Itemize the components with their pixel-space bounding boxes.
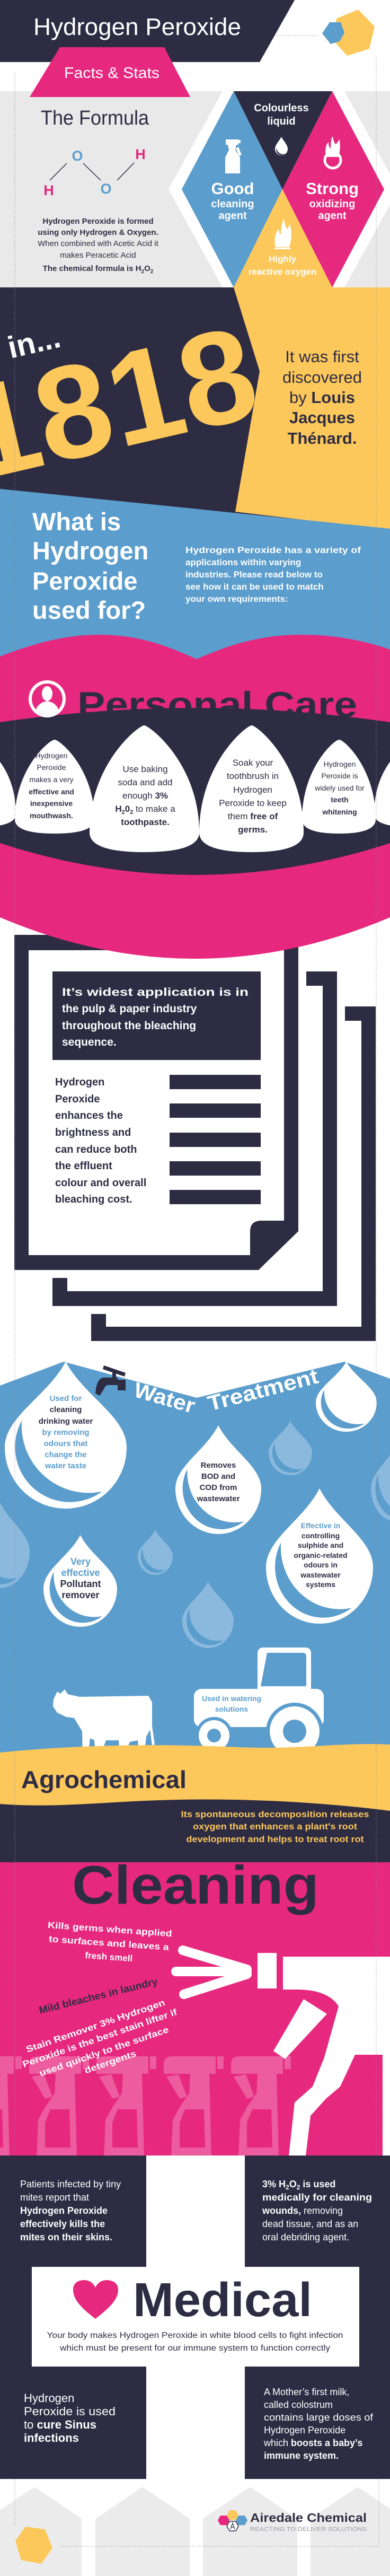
icon: oxidizer flame ring (325, 136, 341, 168)
footer dotted frame (15, 2479, 379, 2546)
text: highly reactive oxygen: Highly (269, 254, 297, 264)
icon: tap (95, 1365, 126, 1396)
text: mild bleaches: Mild bleaches in laundry (38, 1976, 159, 2017)
drop: odour control: sulphide and (298, 1541, 343, 1549)
text: colostrum: contains large doses of (264, 2412, 374, 2423)
footer background shapes (0, 2487, 390, 2576)
text: sinus: Hydrogen (24, 2391, 74, 2405)
text: highly reactive oxygen (249, 254, 316, 277)
subtitle: Facts & Stats (30, 47, 190, 97)
text: toothbrush: Soak your (233, 758, 273, 768)
text: mites: Hydrogen Peroxide (20, 2205, 108, 2216)
text: strong oxidizing agent: oxidizing (309, 198, 355, 210)
text: sinus (24, 2391, 116, 2444)
text: mouthwash: Peroxide (37, 763, 66, 772)
text: mites: mites on their skins. (20, 2232, 112, 2242)
text: intro: see how it can be used to match (185, 582, 324, 592)
callout: widest application: throughout the bleaching (62, 1020, 196, 1032)
panel: medical (0, 2156, 390, 2479)
drop: drinking water: change the (45, 1450, 87, 1459)
text: bleaching benefits: bleaching cost. (55, 1194, 132, 1205)
drop: drinking water: cleaning (50, 1405, 82, 1414)
heading: water treatment: Treatment (205, 1365, 321, 1416)
text: kills germs (48, 1920, 172, 1964)
text: teeth whitening: Hydrogen (324, 760, 356, 768)
text: sinus: infections (24, 2431, 79, 2444)
drop: odour control: controlling (302, 1531, 340, 1540)
text: stain remover: Peroxide is the best stain lifter if (21, 2007, 179, 2070)
text: discovered by (282, 347, 362, 448)
drop: drinking water: drinking water (39, 1417, 93, 1426)
drop: drinking water (5, 1362, 127, 1509)
panel: properties hexagon (169, 91, 390, 287)
text: root development: Its spontaneous decomposition releases (181, 1809, 369, 1819)
callout: widest application (52, 971, 261, 1060)
callout: widest application: It’s widest application is in (62, 986, 249, 998)
faded bottles row (0, 2056, 291, 2157)
drop: pollutant remover: Very (70, 1556, 91, 1567)
text: colostrum: immune system. (264, 2450, 339, 2461)
text: teeth whitening: widely used for (314, 784, 365, 792)
text: toothbrush: toothbrush in (227, 771, 279, 781)
heading: The Formula: The Formula (41, 107, 149, 129)
text: mouthwash (29, 751, 74, 820)
text: good cleaning agent (211, 179, 254, 222)
text: mites (20, 2179, 121, 2242)
text: root development: development and helps to treat root rot (187, 1834, 364, 1844)
text: mites: effectively kills the (20, 2219, 105, 2229)
text: colourless liquid (254, 102, 309, 127)
text: stain remover: detergents (83, 2048, 138, 2075)
text: wound cleaning: O (289, 2179, 297, 2189)
text: watering solutions (202, 1694, 261, 1713)
page 3 outline (91, 1006, 376, 1341)
drop: top right (316, 1362, 377, 1432)
drop: pollutant remover: remover (61, 1590, 100, 1600)
text: toothpaste: 2 (130, 809, 133, 816)
heading: what is hydrogen peroxide used for: used for? (32, 596, 146, 624)
text: toothpaste (115, 764, 175, 827)
text: root development: oxygen that enhances a plant's root (193, 1821, 357, 1832)
text: wound cleaning (262, 2179, 372, 2242)
text: root development (181, 1809, 369, 1844)
text: white blood cells: Your body makes Hydrogen Peroxide in white blood cells to fight infection (47, 2331, 343, 2340)
drop: BOD and COD (175, 1425, 261, 1534)
background: grey formula band (0, 91, 390, 287)
text: discovered by: by Louis (289, 388, 355, 407)
icon: heart (73, 2280, 118, 2319)
text: in...: in... (4, 320, 64, 365)
text: stain remover (21, 1997, 179, 2079)
text: sinus: to cure Sinus (24, 2418, 96, 2431)
drop: odour control (266, 1488, 373, 1624)
text: formula description (38, 217, 159, 275)
text: good cleaning agent: cleaning (211, 198, 254, 210)
panel: pulp & paper document (14, 935, 298, 1270)
text: bleaching benefits: the effluent (55, 1160, 112, 1172)
heading: water treatment (131, 1365, 321, 1418)
text: good cleaning agent: agent (218, 210, 247, 222)
text: formula description: O (144, 264, 150, 273)
drop: odour control: wastewater (300, 1571, 341, 1579)
text: teeth whitening: teeth (331, 795, 349, 804)
teeth (0, 725, 390, 852)
text: mouthwash: inexpensive (30, 799, 73, 808)
text: teeth whitening: whitening (322, 808, 357, 816)
text: bleaching benefits: brightness and (55, 1127, 131, 1138)
text line bars (170, 1075, 261, 1204)
text: white blood cells: which must be present for our immune system to function correctly (59, 2344, 330, 2353)
text: formula description: using only Hydrogen & Oxygen. (38, 228, 158, 237)
drop: BOD and COD: COD from (200, 1483, 237, 1492)
molecule diagram: H (135, 146, 146, 162)
icon: yellow hexagon (15, 2527, 52, 2564)
drop: drinking water: Used for (50, 1394, 82, 1403)
drop: pollutant remover (43, 1535, 117, 1627)
panel: personal care (0, 635, 390, 959)
text: mouthwash: makes a very (29, 775, 74, 784)
text: toothbrush: germs. (238, 825, 268, 835)
drop: odour control: odours in (304, 1561, 338, 1569)
text: sinus: Peroxide is used (24, 2405, 116, 2418)
text: colostrum: which boosts a baby’s (263, 2438, 362, 2448)
text: white blood cells (47, 2331, 343, 2353)
text: wound cleaning: 2 (286, 2184, 289, 2191)
text: discovered by: Thénard. (288, 429, 357, 448)
text: toothpaste: to make a (133, 804, 175, 814)
text: wound cleaning: 2 (297, 2184, 300, 2191)
callout: widest application: sequence. (62, 1036, 117, 1048)
drop: odour control: Effective in (301, 1521, 340, 1530)
icon: tractor (194, 1648, 324, 1760)
drop: drinking water: odours that (44, 1439, 87, 1448)
text: formula description: Hydrogen Peroxide is formed (42, 217, 154, 226)
subtitle: Facts & Stats: Facts & Stats (64, 65, 159, 82)
text: colostrum (263, 2387, 374, 2461)
text: toothbrush: Peroxide to keep (219, 798, 287, 808)
icon: spray bottle (225, 139, 242, 173)
text: watering solutions: Used in watering (202, 1694, 261, 1703)
heading: agrochemical: Agrochemical (21, 1766, 187, 1793)
text: toothpaste: Use baking (122, 764, 168, 774)
panel: cleaning (0, 1855, 390, 2157)
text: discovered by: Jacques (289, 408, 355, 427)
text: bleaching benefits (55, 1076, 146, 1205)
heading: water treatment: Water (131, 1378, 198, 1418)
drop: BOD and COD: BOD and (201, 1472, 235, 1481)
text: toothpaste: soda and add (118, 777, 173, 787)
molecule diagram: H (43, 182, 54, 198)
text: kills germs: fresh smell (85, 1950, 133, 1964)
text: colostrum: called colostrum (264, 2399, 333, 2410)
text: formula description: The chemical formula is H (43, 264, 141, 273)
heading: medical: Medical (133, 2274, 312, 2327)
panel: water treatment (0, 1362, 390, 1760)
text: watering solutions: solutions (215, 1705, 248, 1713)
icon: top hexagons (276, 10, 375, 56)
text: mites: Patients infected by tiny (20, 2179, 121, 2189)
molecule diagram: O (72, 148, 83, 164)
text: bleaching benefits: Hydrogen (55, 1076, 104, 1088)
icon: person (29, 680, 66, 717)
drop: odour control: organic-related (294, 1551, 348, 1559)
text: toothpaste: H (115, 804, 133, 816)
text: colourless liquid: liquid (267, 116, 296, 127)
drop: BOD and COD: Removes (201, 1461, 236, 1470)
text: bleaching benefits: Peroxide (55, 1093, 100, 1105)
icon: spray bottle (176, 1950, 390, 2156)
heading: what is hydrogen peroxide used for (32, 507, 148, 624)
text: teeth whitening: Peroxide is (321, 772, 358, 780)
callout: widest application: the pulp & paper industry (62, 1003, 197, 1015)
text: mouthwash: effective and (29, 787, 74, 796)
text: intro: your own requirements: (185, 594, 288, 604)
heading: personal care: Personal Care (77, 685, 357, 725)
page 2 outline (52, 971, 337, 1306)
drop: pollutant remover: Pollutant (60, 1579, 101, 1589)
text: toothpaste: toothpaste. (121, 817, 170, 827)
molecule diagram: O (100, 181, 112, 197)
text: formula description: 2 (141, 269, 145, 275)
text: bleaching benefits: enhances the (55, 1110, 123, 1121)
text: wound cleaning: medically for cleaning (262, 2192, 372, 2203)
text: kills germs: to surfaces and leaves a (48, 1934, 170, 1952)
text: good cleaning agent: Good (211, 179, 254, 198)
logo: Airedale Chemical: REACTING TO DELIVER SOLUTIONS (250, 2526, 367, 2533)
text: colostrum: A Mother’s first milk, (264, 2387, 349, 2397)
text: kills germs: Kills germs when applied (48, 1920, 172, 1939)
text: mouthwash: mouthwash. (30, 811, 73, 820)
icon: flame (274, 218, 291, 249)
logo: Airedale Chemical: Airedale Chemical (250, 2511, 367, 2525)
text: strong oxidizing agent: agent (318, 210, 347, 222)
heading: what is hydrogen peroxide used for: Peroxide (32, 567, 138, 595)
heading: what is hydrogen peroxide used for: What is (32, 507, 121, 536)
drop: pollutant remover: effective (61, 1567, 100, 1578)
heading: cleaning: Cleaning (72, 1855, 319, 1915)
panel: 1818 discovery (0, 287, 390, 531)
text: stain remover: Stain Remover 3% Hydrogen (25, 1997, 166, 2055)
text: formula description: makes Peracetic Acid (60, 251, 136, 260)
text: mites: mites report that (20, 2192, 89, 2203)
faint drops (0, 1421, 390, 1648)
text: mouthwash: Hydrogen (36, 751, 67, 760)
panel: what is it used for (0, 489, 390, 689)
text: colostrum: Hydrogen Peroxide (264, 2425, 345, 2435)
text: stain remover: used quickly to the surface (38, 2025, 170, 2079)
text: discovered by: discovered (282, 368, 362, 387)
text: wound cleaning: 3% H (262, 2179, 286, 2189)
text: intro: applications within varying (185, 557, 301, 567)
text: strong oxidizing agent: Strong (306, 179, 359, 198)
text: intro: industries. Please read below to (185, 569, 323, 580)
heading: what is hydrogen peroxide used for: Hydrogen (32, 537, 148, 565)
text: strong oxidizing agent (306, 179, 359, 222)
title: Hydrogen Peroxide (33, 13, 241, 40)
text: toothbrush: Hydrogen (233, 785, 272, 795)
text: toothpaste: enough 3% (122, 791, 168, 801)
text: toothpaste: 2 (122, 809, 125, 816)
text: colourless liquid: Colourless (254, 102, 309, 114)
text: formula description: 2 (150, 269, 154, 275)
logo: Airedale Chemical (218, 2510, 367, 2533)
margin dotted lines (15, 57, 376, 2156)
drop: drinking water: water taste (45, 1461, 86, 1470)
text: formula description: When combined with Acetic Acid it (38, 239, 159, 248)
header bar (0, 0, 295, 62)
text: intro (185, 545, 361, 604)
text: bleaching benefits: colour and overall (55, 1177, 146, 1189)
text: intro: Hydrogen Peroxide has a variety of (185, 545, 361, 555)
text: discovered by: It was first (285, 347, 359, 366)
text: teeth whitening (314, 760, 365, 816)
drop: drinking water: by removing (42, 1428, 90, 1437)
panel: agrochemical (0, 1744, 390, 1864)
icon: cow (53, 1689, 155, 1756)
text: wound cleaning: wounds, removing (262, 2205, 343, 2216)
drop: odour control: systems (306, 1580, 335, 1589)
text: wound cleaning: is used (300, 2179, 335, 2189)
text: highly reactive oxygen: reactive oxygen (249, 267, 316, 277)
icon: water drop (275, 137, 288, 155)
drop: BOD and COD: wastewater (197, 1494, 240, 1503)
text: toothpaste: 0 (125, 804, 130, 814)
text: wound cleaning: dead tissue, and as an (262, 2219, 358, 2229)
text: toothbrush (219, 758, 287, 835)
text: wound cleaning: oral debriding agent. (262, 2232, 349, 2242)
text: bleaching benefits: can reduce both (55, 1144, 137, 1155)
text: toothbrush: them free of (228, 811, 278, 821)
molecule diagram (43, 146, 146, 198)
